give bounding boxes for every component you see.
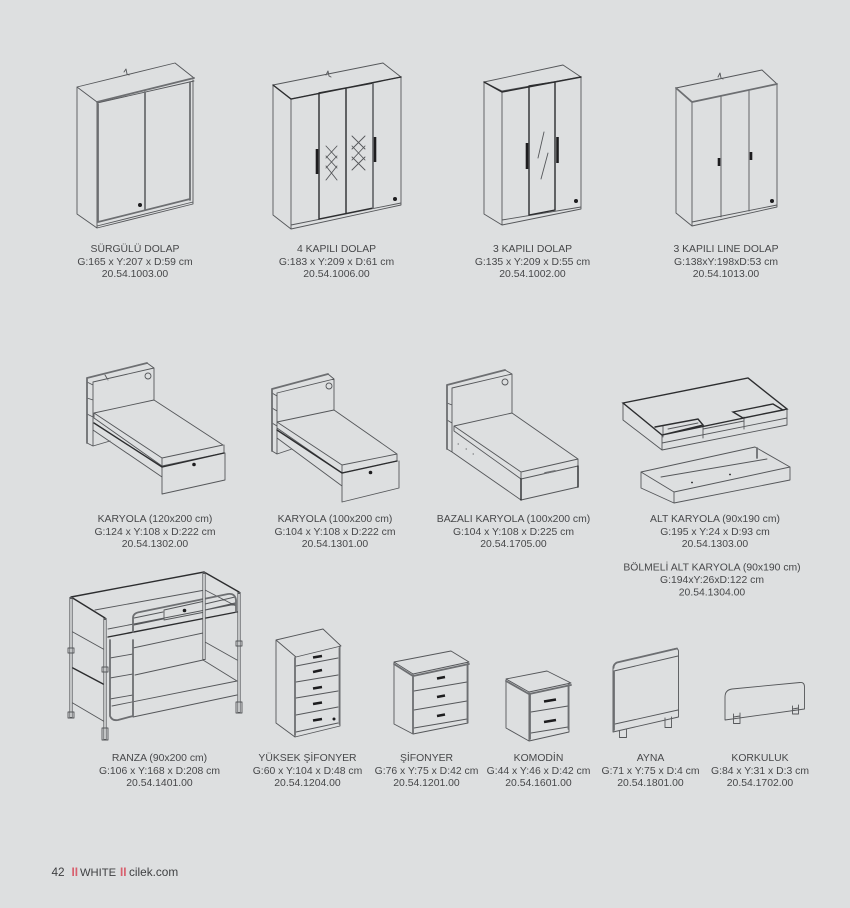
caption: bed 100x200: [274, 514, 396, 550]
product: four door wardrobe: [273, 63, 401, 280]
caption: three door line wardrobe: 3 KAPILI LINE DOLAP: [673, 244, 779, 255]
caption: bed 120x200: G:124 x Y:108 x D:222 cm: [94, 527, 216, 538]
product: bed guard rail: [711, 682, 809, 789]
caption: three door wardrobe: G:135 x Y:209 x D:55 cm: [475, 257, 590, 268]
caption: mirror: AYNA: [637, 753, 664, 764]
caption: pull-out bed: ALT KARYOLA (90x190 cm): [650, 514, 780, 525]
caption: bed 100x200: G:104 x Y:108 x D:222 cm: [274, 527, 396, 538]
caption: bed 100x200: 20.54.1301.00: [302, 539, 368, 550]
icon: sliding wardrobe: [77, 63, 194, 228]
product: three door line wardrobe: [673, 70, 779, 280]
icon: tall chest of drawers: [276, 629, 341, 737]
caption: sliding wardrobe: 20.54.1003.00: [102, 269, 168, 280]
caption: mirror: [602, 753, 700, 789]
caption: three door line wardrobe: G:138xY:198xD:53 cm: [674, 257, 778, 268]
caption: three door wardrobe: [475, 244, 590, 280]
footer: page number and brand: WHITE: [80, 867, 116, 879]
caption: three door line wardrobe: [673, 244, 779, 280]
caption: sliding wardrobe: SÜRGÜLÜ DOLAP: [91, 243, 180, 255]
caption: chest of drawers: [375, 751, 478, 789]
caption: four door wardrobe: 20.54.1006.00: [303, 269, 370, 280]
caption: mirror: G:71 x Y:75 x D:4 cm: [602, 766, 700, 777]
icon: pull-out bed frame: [623, 378, 787, 450]
footer: page number and brand: cilek.com: [129, 865, 178, 879]
caption: compartment pull-out bed: G:194xY:26xD:122 cm: [660, 575, 764, 586]
caption: tall chest of drawers: 20.54.1204.00: [274, 778, 341, 789]
caption: pull-out bed: 20.54.1303.00: [682, 539, 748, 550]
caption: mirror: 20.54.1801.00: [617, 778, 684, 789]
caption: nightstand: G:44 x Y:46 x D:42 cm: [487, 766, 590, 777]
product: bed 120x200: [87, 363, 225, 550]
icon: chest of drawers: [394, 651, 469, 734]
caption: tall chest of drawers: G:60 x Y:104 x D:48 cm: [253, 766, 362, 777]
caption: bed 100x200: KARYOLA (100x200 cm): [278, 514, 392, 525]
icon: bed guard rail: [725, 682, 804, 724]
product: mirror: [602, 648, 700, 789]
product: pull-out bed: [623, 378, 801, 598]
caption: four door wardrobe: 4 KAPILI DOLAP: [297, 244, 376, 255]
caption: nightstand: [487, 751, 590, 789]
caption: four door wardrobe: [279, 244, 394, 280]
icon: three door wardrobe: [484, 65, 581, 225]
caption: chest of drawers: 20.54.1201.00: [393, 778, 460, 789]
caption: bed 120x200: 20.54.1302.00: [122, 539, 188, 550]
product: bunk bed: [68, 572, 242, 789]
caption: three door wardrobe: 20.54.1002.00: [499, 269, 566, 280]
caption: sliding wardrobe: G:165 x Y:207 x D:59 cm: [77, 257, 193, 268]
caption: tall chest of drawers: YÜKSEK ŞİFONYER: [258, 751, 357, 764]
icon: bunk bed: [68, 572, 242, 740]
caption: bed guard rail: [711, 753, 809, 789]
caption: chest of drawers: G:76 x Y:75 x D:42 cm: [375, 766, 478, 777]
caption: bunk bed: G:106 x Y:168 x D:208 cm: [99, 766, 220, 777]
icon: nightstand: [506, 671, 571, 741]
icon: bed 100x200: [272, 374, 399, 502]
icon: bed 120x200: [87, 363, 225, 494]
caption: bed 120x200: [94, 514, 216, 550]
caption: tall chest of drawers: [253, 751, 362, 789]
caption: three door wardrobe: 3 KAPILI DOLAP: [493, 244, 572, 255]
caption: three door line wardrobe: 20.54.1013.00: [693, 269, 759, 280]
icon: four door wardrobe: [273, 63, 401, 229]
caption: compartment pull-out bed: [623, 560, 801, 598]
product: tall chest of drawers: [253, 629, 362, 789]
caption: chest of drawers: ŞİFONYER: [400, 751, 454, 764]
caption: bunk bed: 20.54.1401.00: [126, 778, 193, 789]
caption: bed guard rail: 20.54.1702.00: [727, 778, 793, 789]
caption: storage bed: BAZALI KARYOLA (100x200 cm): [437, 514, 590, 525]
icon: pull-out drawer: [641, 447, 790, 503]
caption: nightstand: 20.54.1601.00: [505, 778, 572, 789]
product: storage bed: [437, 370, 590, 550]
caption: pull-out bed: [650, 514, 780, 550]
product: bed 100x200: [272, 374, 399, 550]
icon: mirror: [613, 648, 678, 738]
caption: four door wardrobe: G:183 x Y:209 x D:61 cm: [279, 257, 394, 268]
caption: bed 120x200: KARYOLA (120x200 cm): [98, 514, 212, 525]
caption: storage bed: [437, 514, 590, 550]
product: chest of drawers: [375, 651, 478, 789]
footer: page number and brand: [52, 865, 178, 879]
product: sliding wardrobe: [77, 63, 194, 280]
product: three door wardrobe: [475, 65, 590, 280]
caption: compartment pull-out bed: BÖLMELİ ALT KARYOLA (90x190 cm): [623, 560, 801, 574]
caption: pull-out bed: G:195 x Y:24 x D:93 cm: [660, 527, 770, 538]
caption: bed guard rail: G:84 x Y:31 x D:3 cm: [711, 766, 809, 777]
footer: page number and brand: II: [72, 865, 78, 879]
caption: compartment pull-out bed: 20.54.1304.00: [679, 588, 745, 598]
caption: bunk bed: RANZA (90x200 cm): [112, 753, 207, 764]
caption: bunk bed: [99, 753, 220, 789]
product: nightstand: [487, 671, 590, 789]
icon: storage bed: [447, 370, 578, 500]
icon: three door line wardrobe: [676, 70, 777, 226]
caption: sliding wardrobe: [77, 243, 193, 280]
footer: page number and brand: II: [120, 865, 127, 879]
caption: nightstand: KOMODİN: [514, 751, 563, 764]
caption: bed guard rail: KORKULUK: [731, 753, 789, 764]
caption: storage bed: G:104 x Y:108 x D:225 cm: [453, 527, 574, 538]
footer: page number and brand: 42: [52, 865, 65, 879]
caption: storage bed: 20.54.1705.00: [480, 539, 547, 550]
